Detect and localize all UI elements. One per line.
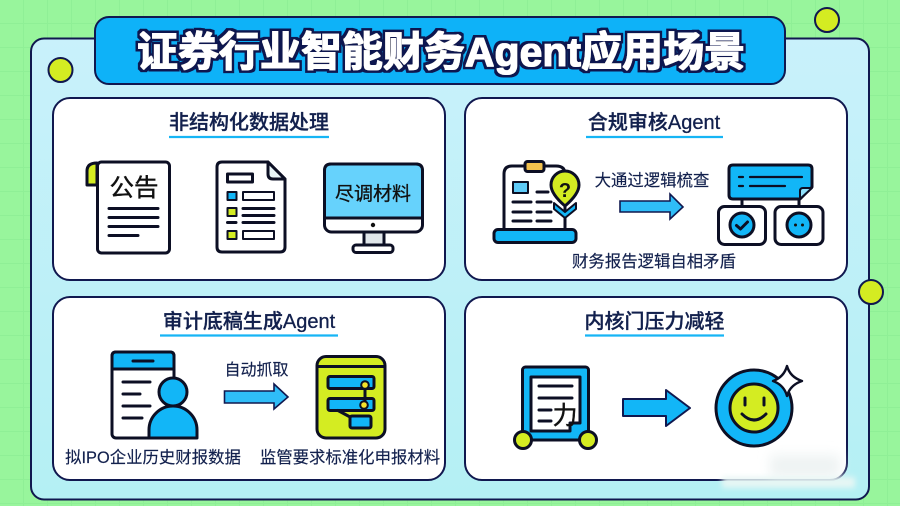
- title: 证券行业智能财务Agent应用场景: [137, 29, 745, 75]
- label: financial report contradictions: 财务报告逻辑自相矛盾: [572, 253, 736, 271]
- heading: 内核门压力减轻: [584, 310, 724, 333]
- icon: clipboard with question: ?: [559, 180, 571, 202]
- panel: audit working papers: [53, 297, 445, 480]
- decorative dot: top left: [48, 58, 72, 82]
- label: auto fetch: 自动抓取: [224, 361, 289, 379]
- decorative dot: top right: [815, 8, 839, 32]
- watermark fade, bottom right: [722, 455, 855, 488]
- icon: hierarchy tree: [718, 165, 823, 244]
- arrow: [623, 390, 690, 426]
- arrow: [620, 194, 683, 219]
- icon: checklist document: [217, 162, 285, 252]
- panel: unstructured data: [53, 98, 445, 280]
- heading: 非结构化数据处理: [169, 111, 329, 134]
- icon: monitor: [324, 164, 422, 252]
- heading: 合规审核Agent: [588, 111, 721, 134]
- icon: monitor: 尽调材料: [335, 183, 411, 205]
- panel: compliance review: [465, 98, 847, 280]
- icon: regulatory form: [317, 356, 385, 438]
- icon: clipboard with question: [494, 162, 579, 242]
- decorative dot: right edge: [859, 280, 883, 304]
- icon: smiley with sparkle: [716, 366, 802, 446]
- label: logic check: 大通过逻辑梳查: [595, 172, 709, 190]
- title banner: [95, 17, 785, 84]
- label: IPO history data: 拟IPO企业历史财报数据: [65, 449, 241, 467]
- label: regulatory materials: 监管要求标准化申报材料: [260, 449, 440, 467]
- icon: document with person: [112, 352, 197, 438]
- icon: pressure document: [514, 367, 596, 448]
- panel: internal review relief: [465, 297, 847, 480]
- heading: 审计底稿生成Agent: [163, 310, 336, 333]
- icon: announcement document: 公告: [110, 174, 158, 202]
- arrow: [224, 384, 288, 409]
- icon: pressure document: 力: [552, 402, 578, 430]
- icon: announcement document: [87, 162, 170, 253]
